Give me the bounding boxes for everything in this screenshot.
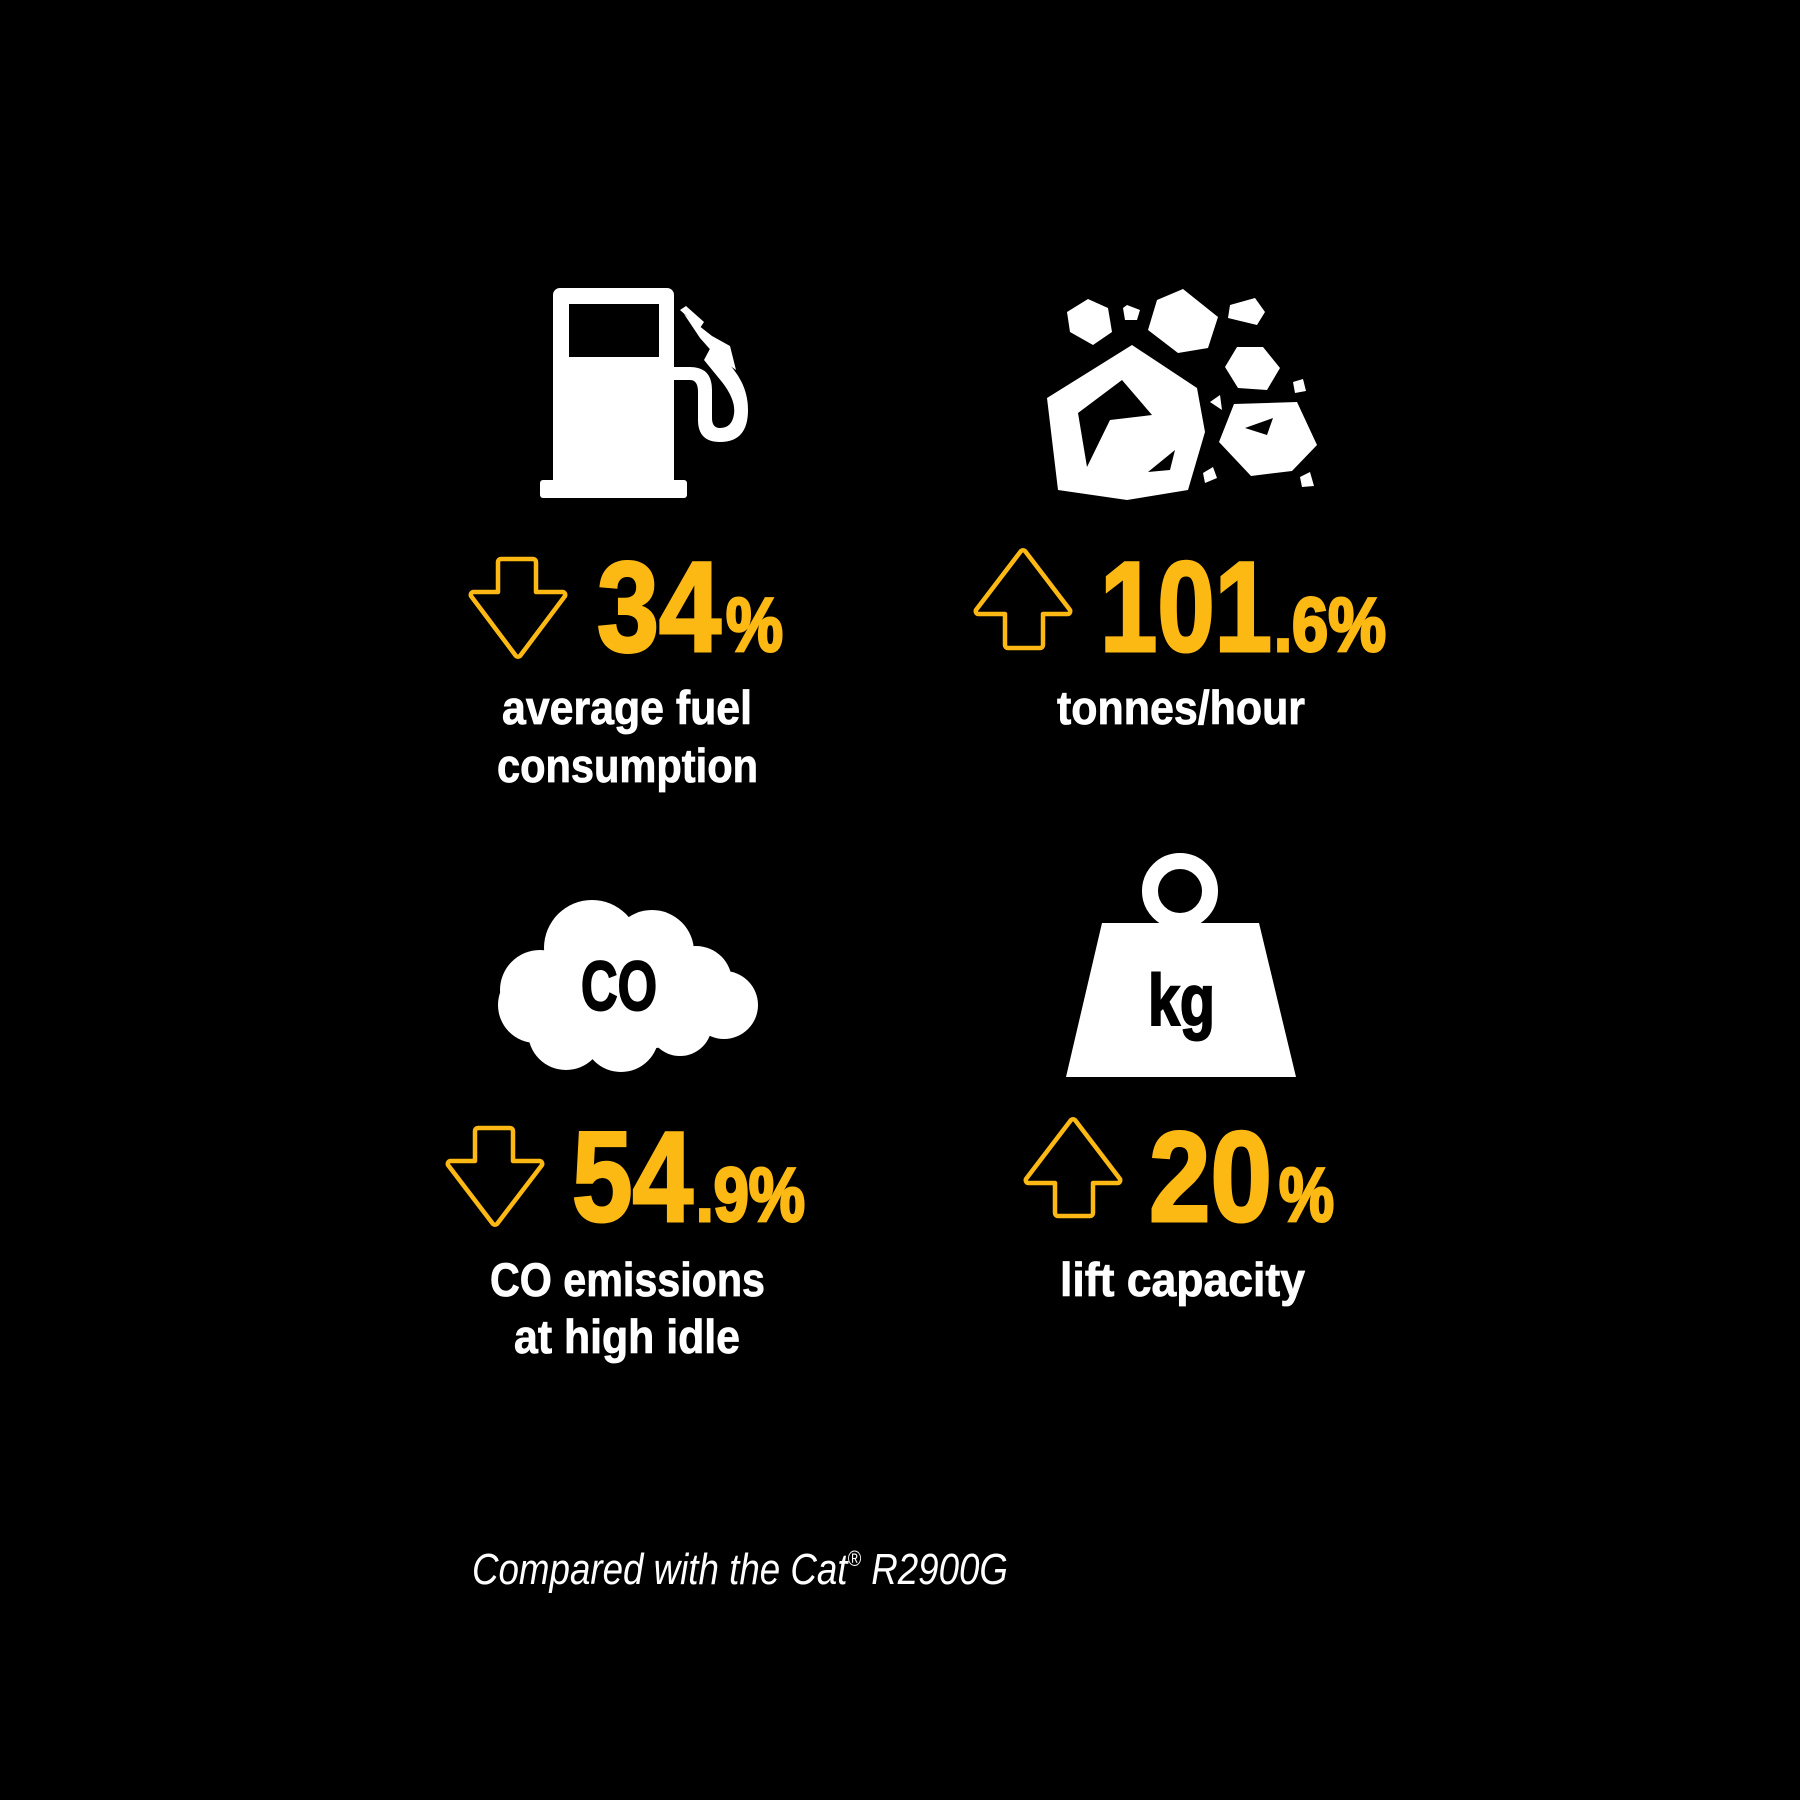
arrow: down (448, 1128, 542, 1225)
arrow: down (471, 559, 565, 657)
label: tonnes/hour: tonnes/hour (1057, 681, 1305, 734)
icon: cloud (498, 900, 758, 1072)
label: average fuel consumption: average fuel (502, 681, 752, 734)
stat: 34%: 34 (597, 536, 721, 679)
panel: lift capacity: % (1279, 1153, 1334, 1238)
icon text: kg: kg (1148, 961, 1215, 1041)
arrow: up (1026, 1119, 1120, 1216)
panel: fuel consumption: consumption (497, 739, 758, 792)
stat: 54.9%: 54 (572, 1106, 693, 1249)
panel: CO emissions: .9% (696, 1153, 805, 1238)
stat: 101.6%: 101 (1100, 536, 1272, 679)
stat: 20%: 20 (1149, 1106, 1272, 1249)
panel: fuel consumption (471, 288, 783, 792)
label: lift capacity: lift capacity (1060, 1253, 1305, 1306)
arrow: up (976, 550, 1070, 648)
icon: fuel pump (540, 288, 748, 498)
icon text: CO: CO (581, 947, 657, 1025)
icon: weight (1066, 861, 1296, 1077)
panel: CO emissions: at high idle (514, 1310, 740, 1363)
footnote: ® (848, 1546, 862, 1571)
icon: rocks (1047, 289, 1317, 500)
footnote: Compared with the Cat (472, 1545, 922, 1594)
footnote: R2900G (861, 1545, 1008, 1594)
panel: tonnes per hour (976, 289, 1386, 734)
panel: lift capacity (1026, 861, 1334, 1306)
panel: tonnes per hour: .6% (1274, 583, 1386, 668)
label: CO emissions at high idle: CO emissions (490, 1253, 765, 1306)
panel: CO emissions (448, 900, 805, 1363)
panel: fuel consumption: % (726, 583, 783, 668)
